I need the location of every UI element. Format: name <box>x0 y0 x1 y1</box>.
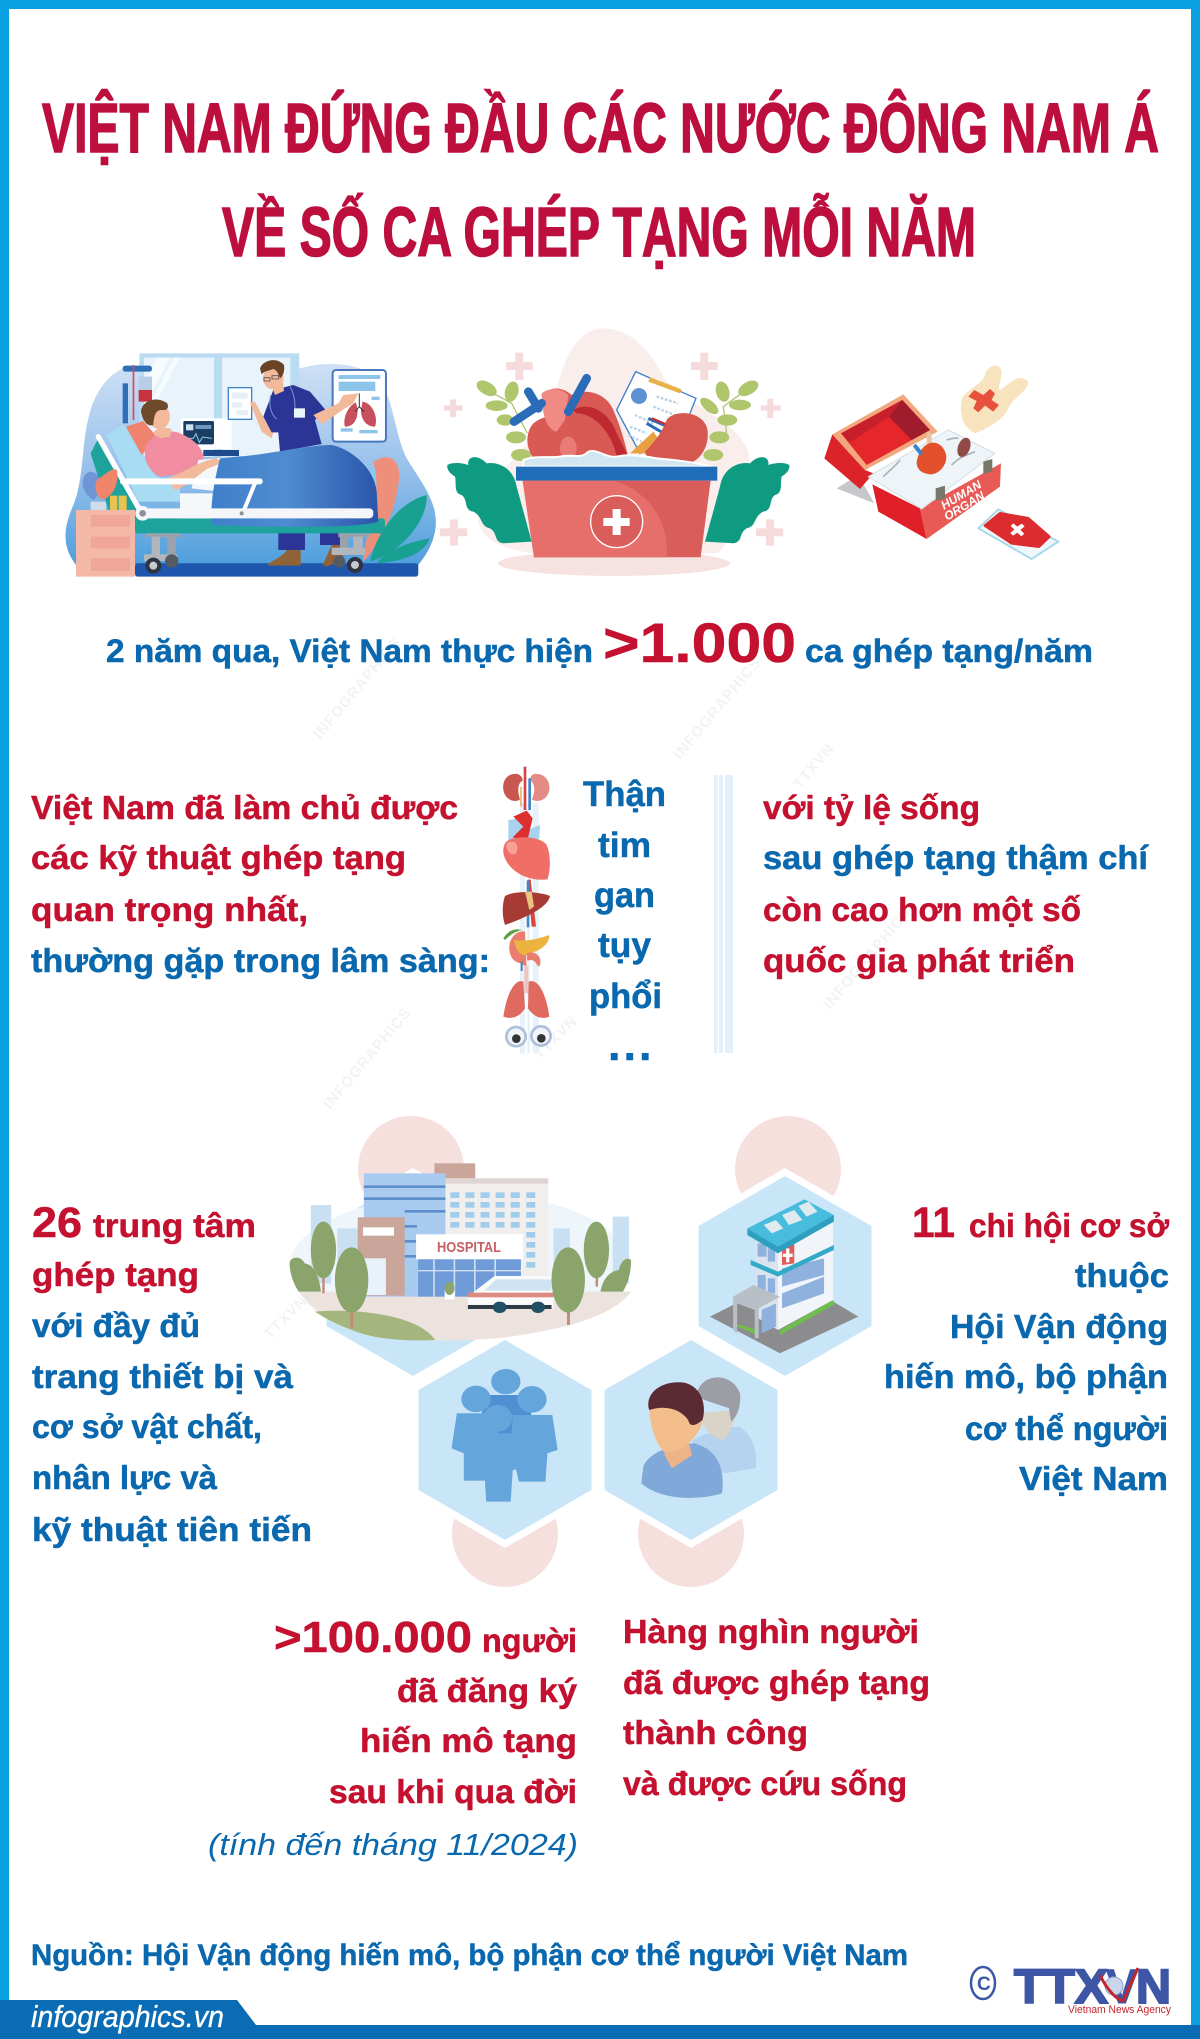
text block: 26 centers: kỹ thuật tiên tiến <box>32 1511 312 1548</box>
logo: TTXVN <box>971 1961 1171 2016</box>
text block: thousands saved: thành công <box>623 1714 808 1751</box>
box label: human organ <box>936 477 990 523</box>
hospital sign: HOSPITAL <box>437 1239 501 1256</box>
icon: heart <box>503 811 550 880</box>
text block: 100.000 registered donors <box>208 1613 578 1862</box>
logo: TTXVN: N <box>1136 1961 1171 2014</box>
organ column icons <box>503 767 552 1053</box>
illustration: human organ transport box <box>824 366 1058 559</box>
logo: TTXVN: TTX <box>1014 1961 1108 2014</box>
text block: 11 branches: thuộc <box>1075 1257 1169 1294</box>
text block: 26 centers: trang thiết bị và <box>32 1358 294 1395</box>
text block: 26 centers: với đầy đủ <box>32 1307 200 1344</box>
text block: 26 centers: 26 <box>32 1199 82 1247</box>
text block: 26 centers <box>32 1199 312 1548</box>
logo: TTXVN: C <box>977 1974 991 1995</box>
text block: thousands saved: Hàng nghìn người <box>623 1613 919 1650</box>
subheading with 1.000 transplants per year: 2 năm qua, Việt Nam thực hiện <box>106 633 593 669</box>
text block: 100.000 registered donors: người <box>482 1622 577 1659</box>
text block: 100.000 registered donors: >100.000 <box>274 1613 472 1662</box>
icon: lungs <box>503 981 549 1018</box>
text block: 11 branches: 11 <box>912 1199 955 1247</box>
organ names list: gan <box>594 876 655 915</box>
text block: 26 centers: nhân lực và <box>32 1459 218 1496</box>
text block: 100.000 registered donors: hiến mô tạng <box>360 1722 577 1759</box>
text block: mastered techniques: thường gặp trong lâm sàng: <box>31 942 490 979</box>
illustration: isometric medical building <box>710 1199 858 1353</box>
text block: survival rate: quốc gia phát triển <box>763 942 1075 979</box>
text block: 26 centers: trung tâm <box>93 1207 256 1244</box>
illustration: organ box with plus emblem <box>440 328 789 576</box>
box label: human organ: ORGAN <box>941 488 987 523</box>
organ names list: phổi <box>589 977 662 1016</box>
organ names list: Thận <box>583 775 666 814</box>
text block: mastered techniques: Việt Nam đã làm chủ được <box>31 789 458 826</box>
text block: 100.000 registered donors: (tính đến tháng 11/2024) <box>208 1827 578 1862</box>
text block: mastered techniques: các kỹ thuật ghép tạng <box>31 839 406 876</box>
text block: 11 branches: cơ thể người <box>965 1410 1168 1447</box>
organ names list: ... <box>608 1019 655 1070</box>
icon: pancreas and duodenum <box>503 929 549 993</box>
illustration: group of people <box>452 1369 558 1502</box>
icon: liver <box>503 879 550 927</box>
illustration: transplant recipients <box>641 1377 756 1498</box>
subheading with 1.000 transplants per year <box>106 611 1093 674</box>
pink circles behind hexagons <box>358 1116 841 1587</box>
organ names list <box>583 775 666 1070</box>
illustration: hospital scene <box>290 1163 631 1341</box>
logo: TTXVN: Vietnam News Agency <box>1068 2004 1171 2016</box>
logo: TTXVN: V <box>1106 1961 1138 2014</box>
text: INFOGRAPHICS <box>670 654 765 763</box>
hexagon: hospital <box>323 1172 503 1380</box>
icon: eyes <box>505 1025 552 1048</box>
text: INFOGRAPHICS <box>820 904 915 1013</box>
divider bars <box>714 775 733 1053</box>
subheading with 1.000 transplants per year: ca ghép tạng/năm <box>805 633 1093 669</box>
text: INFOGRAPHICS <box>310 634 405 743</box>
text block: survival rate: với tỷ lệ sống <box>763 789 980 826</box>
text block: 11 branches: Việt Nam <box>1019 1460 1168 1497</box>
text block: survival rate <box>763 789 1150 979</box>
illustration: doctor and patient in hospital bed <box>65 353 436 577</box>
text block: 11 branches: hiến mô, bộ phận <box>884 1358 1168 1395</box>
text: TTXVN <box>531 1013 581 1063</box>
text: TTXVN <box>790 740 838 793</box>
text block: 100.000 registered donors: đã đăng ký <box>397 1672 578 1709</box>
subheading with 1.000 transplants per year: >1.000 <box>603 611 796 674</box>
hexagon: transplant recipients <box>601 1336 781 1544</box>
text block: thousands saved <box>623 1613 930 1802</box>
footer bar with site tab <box>0 2000 1200 2039</box>
text block: 26 centers: cơ sở vật chất, <box>32 1408 262 1445</box>
organ names list: tim <box>598 826 651 865</box>
source line: Nguồn: Hội Vận động hiến mô, bộ phận cơ thể người Việt Nam <box>31 1939 908 1972</box>
text block: survival rate: còn cao hơn một số <box>763 891 1081 928</box>
text: TTXVN <box>261 1293 311 1343</box>
text block: 26 centers: ghép tạng <box>32 1256 199 1293</box>
box label: human organ: HUMAN <box>938 477 984 512</box>
text block: mastered techniques <box>31 789 490 979</box>
text block: thousands saved: và được cứu sống <box>623 1765 907 1802</box>
text block: survival rate: sau ghép tạng thậm chí <box>763 839 1150 876</box>
text: INFOGRAPHICS <box>320 1004 415 1113</box>
text block: 11 branches <box>884 1199 1170 1497</box>
hexagon: building <box>695 1172 875 1380</box>
text block: mastered techniques: quan trọng nhất, <box>31 891 308 928</box>
icon: kidneys <box>503 767 550 810</box>
text block: 11 branches: Hội Vận động <box>950 1308 1168 1345</box>
site name: infographics.vn <box>31 1999 224 2034</box>
title <box>42 88 1159 271</box>
organ names list: tụy <box>598 926 652 965</box>
text block: thousands saved: đã được ghép tạng <box>623 1664 930 1701</box>
text block: 11 branches: chi hội cơ sở <box>969 1207 1170 1244</box>
hexagon: people <box>415 1336 595 1544</box>
text block: 100.000 registered donors: sau khi qua đời <box>329 1773 577 1810</box>
